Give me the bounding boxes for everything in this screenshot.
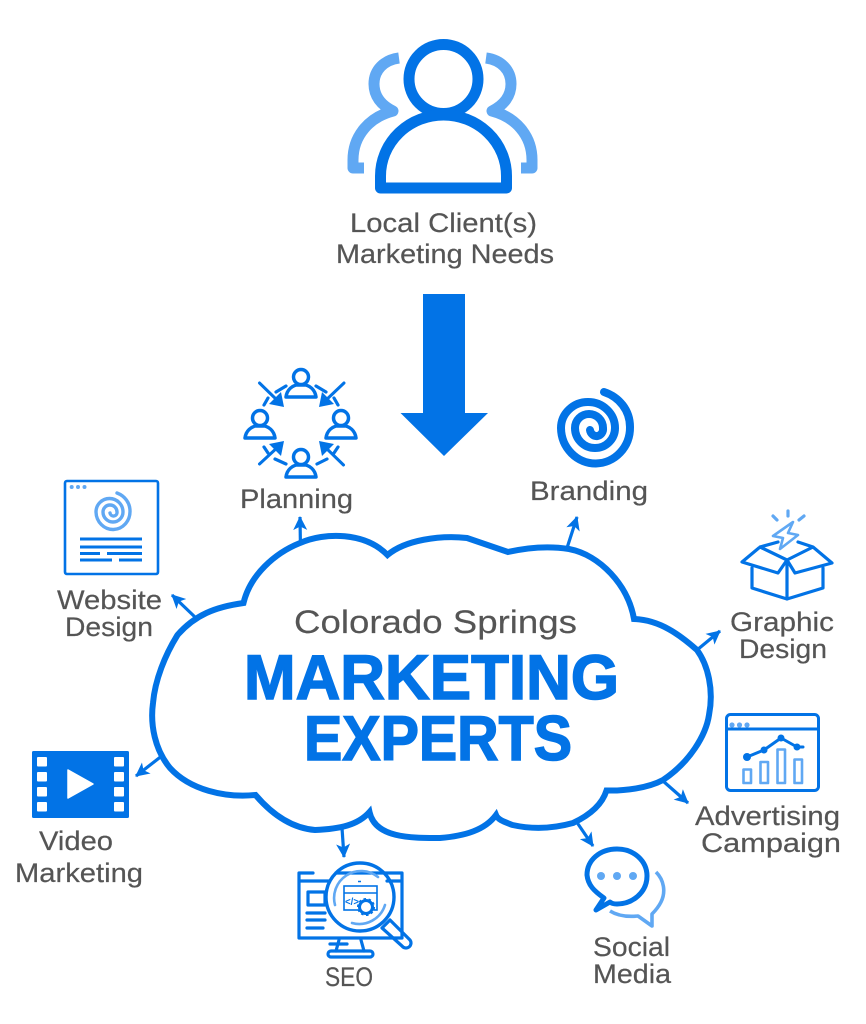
label: graphic design: Design <box>739 634 827 664</box>
arrow: to planning <box>298 517 302 550</box>
icon: advertising campaign <box>726 714 818 790</box>
label: advertising campaign: Campaign <box>701 828 841 858</box>
label: advertising campaign: Advertising <box>695 801 840 831</box>
label: video marketing: Marketing <box>15 858 143 888</box>
label: website design: Website <box>57 585 162 615</box>
label: seo: SEO <box>325 962 373 992</box>
label: social media <box>593 932 671 989</box>
cloud outline <box>152 536 711 838</box>
arrow: to advertising campaign <box>663 781 688 803</box>
label: graphic design: Graphic <box>730 607 834 637</box>
arrow: to seo <box>342 828 344 857</box>
label: website design: Design <box>65 612 153 642</box>
arrow: to video marketing <box>136 755 163 776</box>
label: planning: Planning <box>240 484 353 514</box>
arrow: to social media <box>576 821 593 846</box>
title: marketing experts: EXPERTS <box>304 704 572 774</box>
title: marketing experts: MARKETING <box>244 643 619 713</box>
label: social media: Social <box>593 932 670 962</box>
label: graphic design <box>730 607 834 664</box>
text: colorado springs: Colorado Springs <box>294 604 577 640</box>
label: video marketing <box>15 826 143 888</box>
arrow: to graphic design <box>697 631 720 650</box>
icon: local clients group <box>353 44 532 188</box>
label: advertising campaign <box>695 801 841 858</box>
label: social media: Media <box>593 959 671 989</box>
icon: social media chat <box>587 849 664 926</box>
arrow: to branding <box>567 517 577 548</box>
icon: website design <box>65 481 158 574</box>
icon: seo: </> <box>345 897 359 908</box>
icon: video marketing <box>32 751 129 818</box>
icon: seo <box>299 863 411 957</box>
label: website design <box>57 585 162 642</box>
icon: graphic design box <box>742 511 832 599</box>
arrow: to website design <box>172 595 196 618</box>
arrow: big down arrow <box>400 294 488 456</box>
icon: branding spiral <box>561 392 630 463</box>
text: local client marketing needs: Local Client(s) <box>350 208 537 238</box>
icon: planning <box>245 370 356 477</box>
label: branding: Branding <box>530 476 648 506</box>
label: video marketing: Video <box>39 826 113 856</box>
text: local client marketing needs <box>336 208 554 269</box>
title: marketing experts <box>244 643 619 774</box>
text: local client marketing needs: Marketing Needs <box>336 239 554 269</box>
